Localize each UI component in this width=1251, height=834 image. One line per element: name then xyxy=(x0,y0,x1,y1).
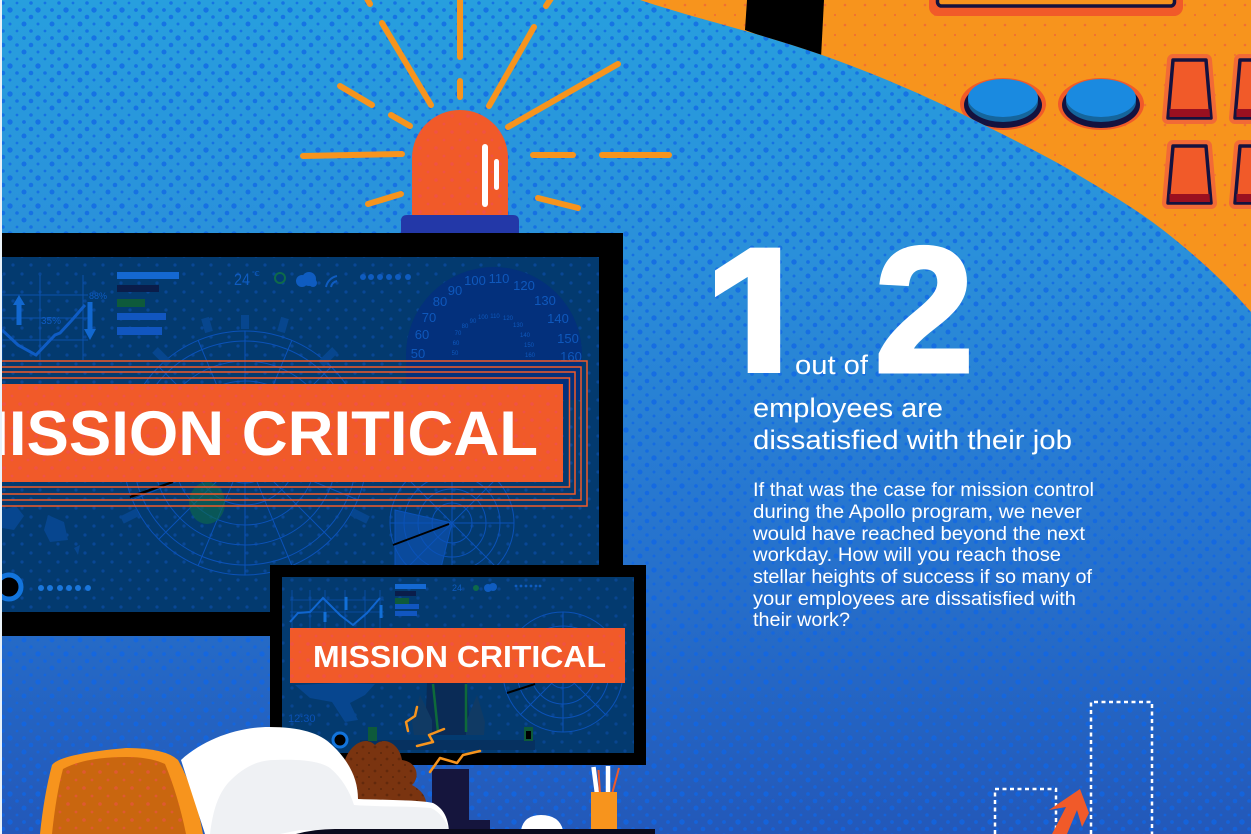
small monitor screen: 12:30 xyxy=(288,713,316,725)
line chart xyxy=(2,275,107,360)
mini weather icons xyxy=(452,583,542,592)
body text: your employees are dissatisfied with xyxy=(753,589,1076,610)
dial xyxy=(0,575,21,599)
monitor screen xyxy=(0,257,599,612)
banner outlines xyxy=(0,361,587,506)
gauge needles xyxy=(393,524,449,545)
mini bars xyxy=(395,584,426,616)
small banner xyxy=(290,628,625,683)
body text: would have reached beyond the next xyxy=(752,524,1086,545)
speedometer: 50 xyxy=(452,351,459,357)
icon: sparks xyxy=(406,707,480,772)
speedometer: 110 xyxy=(489,271,509,286)
body text: stellar heights of success if so many of xyxy=(753,567,1093,588)
stat: 1 out of 2: 2 xyxy=(875,211,973,409)
dial xyxy=(333,733,347,747)
panel: small monitor xyxy=(270,565,646,765)
speedometer: 100 xyxy=(478,315,489,321)
subheading: dissatisfied with their job xyxy=(753,425,1072,455)
mini world map xyxy=(295,683,375,722)
radar globe xyxy=(122,315,368,575)
chair xyxy=(40,748,203,834)
small monitor screen xyxy=(282,577,634,753)
speedometer: 120 xyxy=(513,278,535,293)
icon: pencil cup xyxy=(591,766,619,830)
mini weather icons: 24 xyxy=(452,583,462,593)
body text: workday. How will you reach those xyxy=(752,545,1061,566)
line chart: 88% xyxy=(89,291,107,301)
stat: 1 out of 2 xyxy=(715,244,969,374)
round button 1 xyxy=(960,78,1046,130)
desk xyxy=(296,829,655,834)
hair xyxy=(345,741,426,808)
speedometer: 50 xyxy=(411,346,425,361)
status bars xyxy=(117,272,179,335)
world map xyxy=(2,506,80,555)
speedometer: 100 xyxy=(464,273,486,288)
small radar xyxy=(390,482,514,565)
speedometer: 110 xyxy=(490,314,500,320)
status dots xyxy=(38,585,91,591)
body text: If that was the case for mission control xyxy=(753,480,1094,501)
speedometer: 150 xyxy=(524,343,535,349)
speedometer: 80 xyxy=(433,294,447,309)
stat: 1 out of 2: out of xyxy=(795,350,869,380)
panel: orange control console xyxy=(640,0,1251,320)
speedometer: 70 xyxy=(422,310,436,325)
key 3 xyxy=(1168,146,1211,203)
speedometer: 160 xyxy=(525,353,536,359)
line chart: 35% xyxy=(41,316,61,327)
speedometer: 70 xyxy=(455,331,462,337)
weather icons: °C xyxy=(252,270,260,278)
monitor stand xyxy=(432,769,490,834)
console display xyxy=(929,0,1183,16)
speedometer: 60 xyxy=(415,327,429,342)
icon: desk mouse xyxy=(521,815,563,830)
speedometer: 80 xyxy=(462,324,469,330)
launch towers xyxy=(368,727,377,741)
subheading: employees are xyxy=(753,393,943,423)
stat: 1 out of 2: 1 xyxy=(699,202,819,443)
icon: alarm light rays xyxy=(303,0,669,208)
left edge strip xyxy=(0,0,2,834)
round button 2 xyxy=(1058,78,1144,130)
body text: during the Apollo program, we never xyxy=(753,502,1083,523)
panel: large monitor xyxy=(0,233,623,636)
rocket xyxy=(360,683,535,750)
speedometer: 90 xyxy=(448,283,462,298)
weather icons xyxy=(234,271,411,288)
body text: their work? xyxy=(753,610,850,631)
banner: mission critical xyxy=(0,384,563,482)
monitor stand xyxy=(745,0,824,58)
body text xyxy=(752,480,1094,631)
key 1 xyxy=(1168,60,1211,118)
mini radar xyxy=(503,612,623,732)
speedometer: 160 xyxy=(560,349,582,364)
speedometer: 140 xyxy=(520,333,531,339)
speedometer: 130 xyxy=(534,293,556,308)
small banner: MISSION CRITICAL xyxy=(313,639,606,674)
weather icons: 24 xyxy=(234,270,250,289)
mini chart xyxy=(290,590,384,630)
speedometer: 130 xyxy=(513,323,524,329)
key 2 xyxy=(1235,60,1251,118)
speedometer: 90 xyxy=(470,319,477,325)
icon: alarm light xyxy=(401,110,519,233)
speedometer: 150 xyxy=(557,331,579,346)
astronaut body in white shirt xyxy=(181,727,449,834)
speedometer xyxy=(406,267,582,400)
speedometer: 60 xyxy=(453,341,460,347)
green globe xyxy=(189,482,225,524)
key 4 xyxy=(1235,146,1251,203)
subheading xyxy=(753,393,1072,455)
speedometer: 140 xyxy=(547,311,569,326)
bar chart: dashed bars xyxy=(995,702,1152,834)
arrow: growth xyxy=(1049,789,1089,834)
speedometer: 120 xyxy=(503,316,514,322)
